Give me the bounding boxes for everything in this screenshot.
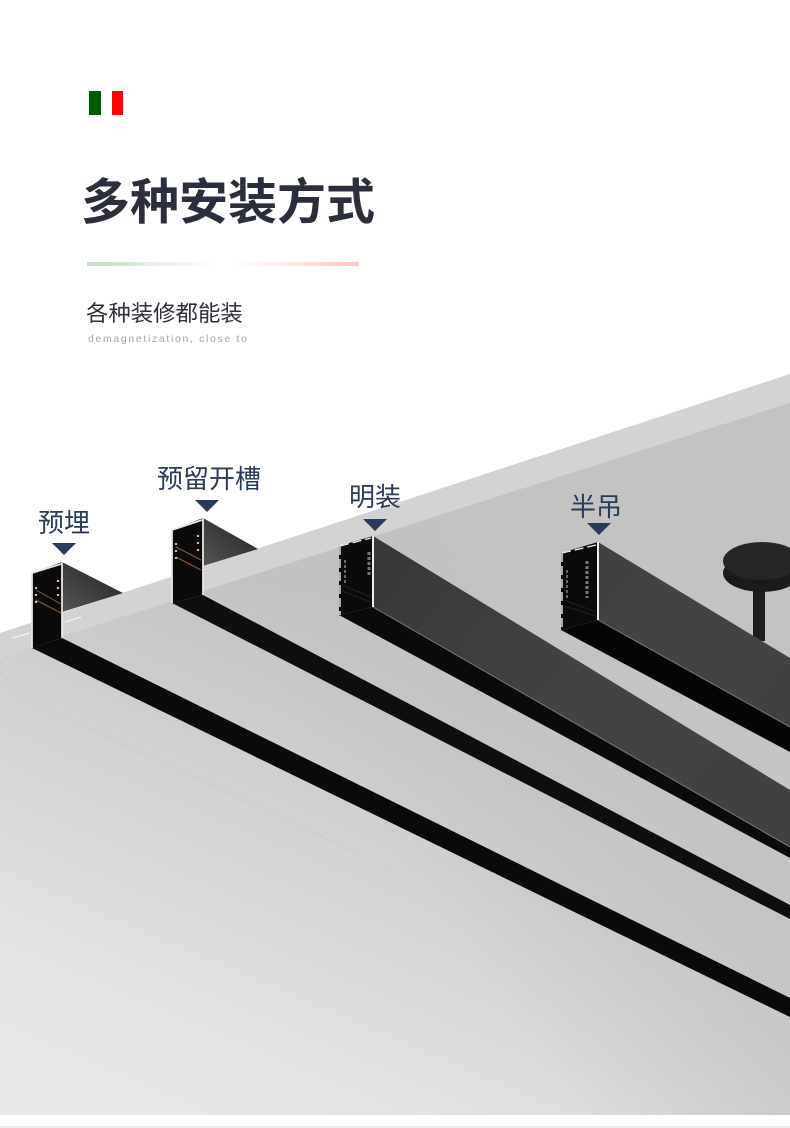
label: 半吊 [570, 492, 622, 535]
label: 预留开槽: 预留开槽 [157, 464, 261, 494]
icon: Italian flag [89, 91, 123, 115]
english caption: demagnetization, close to [88, 333, 249, 345]
label: 明装: 明装 [349, 482, 401, 512]
title: 多种安装方式 [81, 176, 375, 230]
track: surface mounted 明装 [339, 536, 790, 858]
label: 预埋 [38, 508, 90, 555]
ceiling surface [0, 374, 790, 1115]
label: 预埋: 预埋 [38, 508, 90, 538]
label: 预留开槽 [157, 464, 261, 512]
track: embedded 预埋 [0, 562, 790, 1017]
subtitle: 各种装修都能装 [86, 301, 243, 326]
label: 明装 [349, 482, 401, 531]
track: slotted 预留开槽 [172, 518, 790, 919]
label: 半吊: 半吊 [570, 492, 622, 522]
divider: green and red gradient rule [87, 262, 359, 266]
track: semi-suspended 半吊 [561, 542, 790, 752]
bottom strip [0, 1126, 790, 1128]
icon: ceiling canopy and stem [723, 542, 790, 641]
